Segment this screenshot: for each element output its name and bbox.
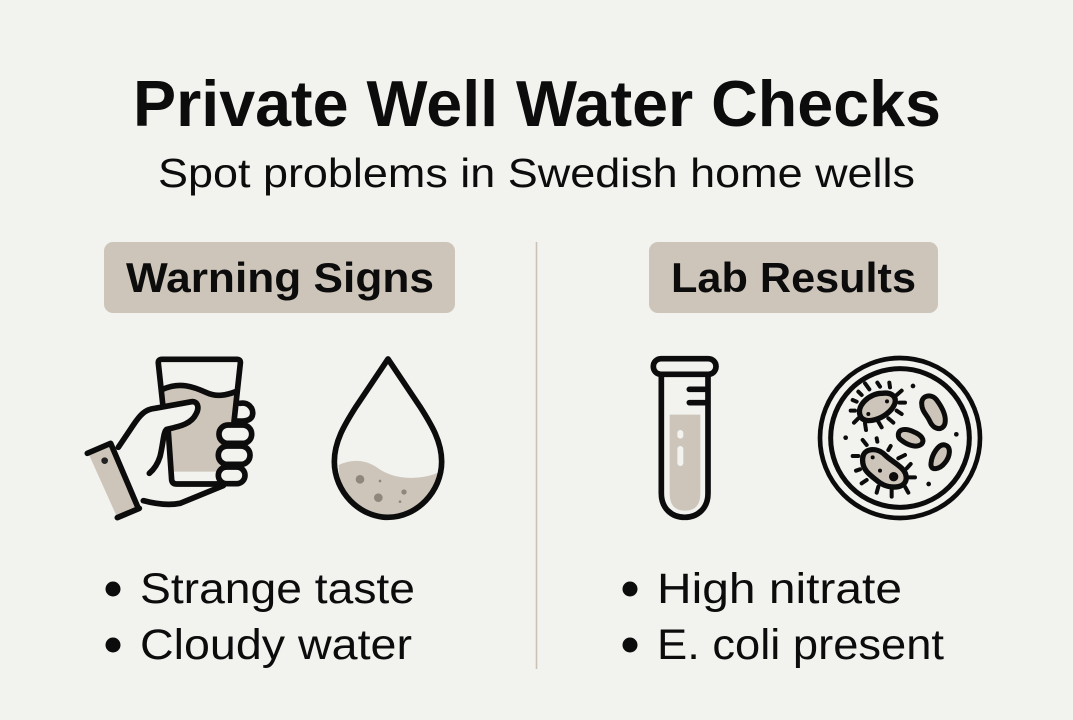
heading: warning signs: Warning Signs — [126, 254, 434, 301]
title: Private Well Water Checks — [133, 67, 941, 140]
icon: test tube — [653, 359, 716, 517]
subtitle: Spot problems in Swedish home wells — [158, 150, 915, 196]
icon: water drop with sediment — [334, 359, 442, 517]
bacterium: lower spiky — [853, 438, 915, 497]
icon: petri dish with bacteria — [820, 358, 980, 518]
list: lab results: E. coli present — [657, 621, 944, 669]
heading: lab results: Lab Results — [671, 254, 916, 301]
heading: lab results — [649, 242, 938, 313]
list: warning signs — [106, 565, 415, 669]
heading: warning signs — [104, 242, 455, 313]
list: warning signs: Cloudy water — [140, 621, 412, 669]
bacterium: rods — [898, 396, 949, 469]
list: lab results — [622, 565, 944, 669]
bacterium: upper spiky — [851, 383, 905, 430]
list: lab results: High nitrate — [657, 565, 902, 613]
list: warning signs: Strange taste — [140, 565, 415, 613]
icon: hand holding glass of cloudy water — [87, 359, 253, 518]
